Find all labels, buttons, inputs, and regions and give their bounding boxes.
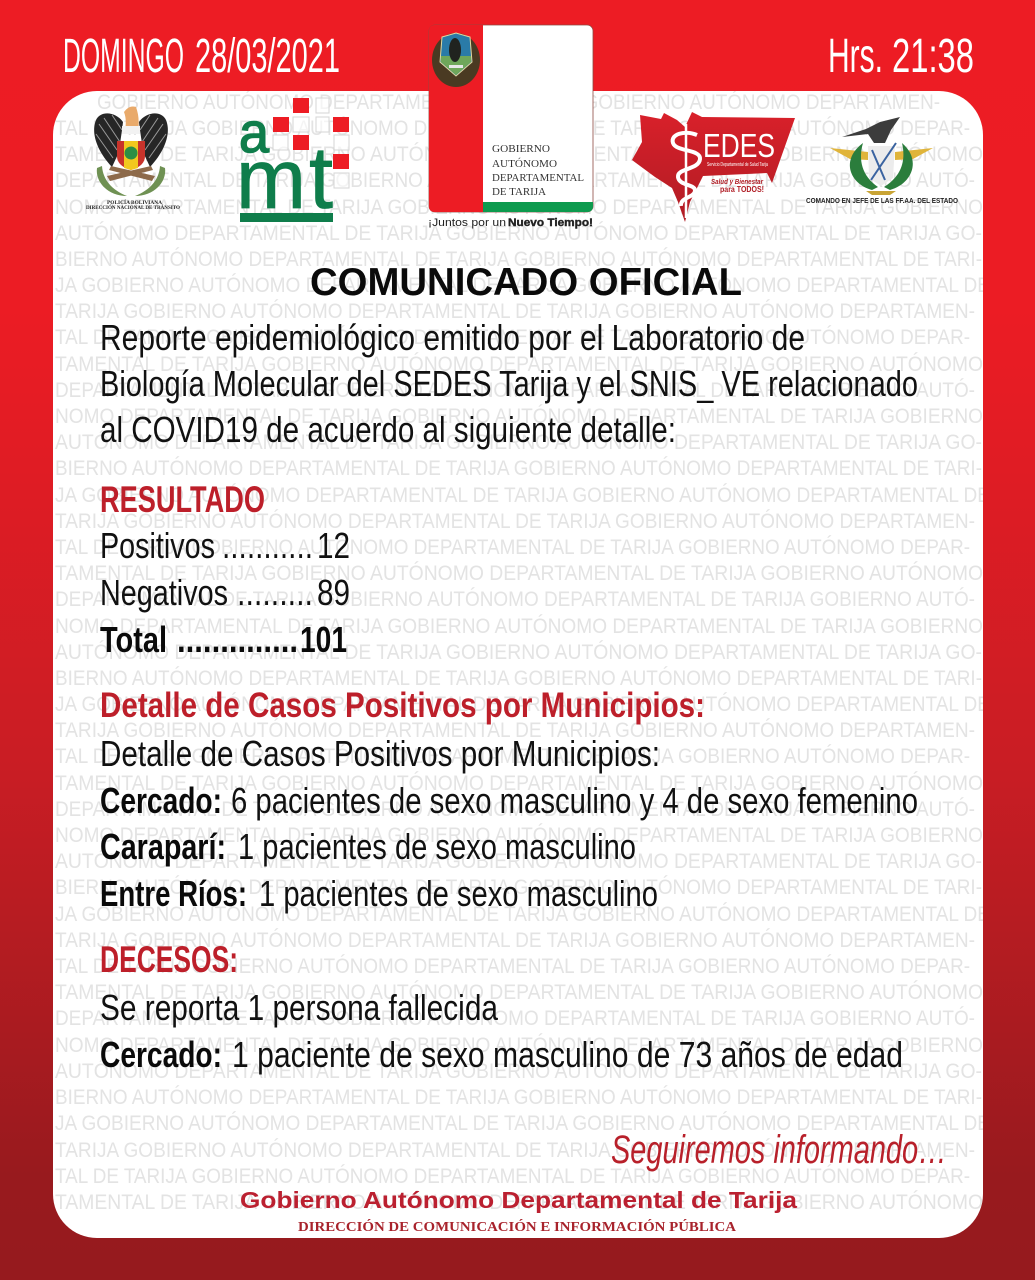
footer: department: DIRECCIÓN DE COMUNICACIÓN E INFORMACIÓN PÚBLICA (298, 1218, 737, 1235)
deaths detail: Se reporta 1 persona fallecida (100, 987, 499, 1028)
time heading: 21:38 (892, 30, 974, 83)
logo: gobierno autónomo card: DE TARIJA (492, 187, 546, 198)
logo: SEDES (632, 112, 795, 222)
deaths detail (100, 987, 903, 1075)
date heading: DOMINGO (63, 30, 184, 83)
results list: 89 (317, 572, 350, 613)
time heading: Hrs. (828, 30, 883, 83)
logo: amt (236, 98, 349, 227)
logo: comando en jefe emblem (806, 117, 959, 205)
watermark text pattern: AUTÓNOMO DEPARTAMENTAL DE TARIJA GOBIERNO AUTÓNOMO DEPARTAMENTAL DE TARIJA GO- (55, 641, 982, 664)
watermark text pattern: TAMENTAL DE TARIJA GOBIERNO AUTÓNOMO DEPARTAMENTAL DE TARIJA GOBIERNO AUTÓNOMO (55, 562, 983, 585)
watermark text pattern: GOBIERNO AUTÓNOMO DEPARTAMENTAL DE TARIJA GOBIERNO AUTÓNOMO DEPARTAMEN- (97, 91, 940, 114)
results list: .............. (177, 619, 298, 660)
results list: ......... (237, 572, 313, 613)
logo: policía eagle emblem (86, 107, 180, 211)
logo: policía eagle emblem: DIRECCIÓN NACIONAL DE TRÁNSITO (86, 205, 180, 211)
intro paragraph: Reporte epidemiológico emitido por el Laboratorio de (100, 317, 805, 358)
watermark text pattern: AUTÓNOMO DEPARTAMENTAL DE TARIJA GOBIERNO AUTÓNOMO DEPARTAMENTAL DE TARIJA GO- (55, 222, 982, 245)
deaths detail: Cercado: (100, 1034, 222, 1075)
municipal detail list: Caraparí: (100, 826, 226, 867)
municipal detail list: 1 pacientes de sexo masculino (259, 873, 658, 914)
results list: 12 (317, 525, 350, 566)
heading: casos positivos por municipios: Detalle de Casos Positivos por Municipios: (100, 686, 705, 725)
watermark text pattern: AUTÓNOMO DEPARTAMENTAL DE TARIJA GOBIERNO AUTÓNOMO DEPARTAMENTAL DE TARIJA GO- (55, 431, 982, 454)
results list: ........... (222, 525, 313, 566)
logo: amt: a (239, 101, 269, 165)
results list: 101 (300, 619, 347, 660)
slogan: Nuevo Tiempo! (508, 217, 593, 229)
municipal detail list: Detalle de Casos Positivos por Municipios: (100, 733, 660, 774)
slogan: ¡Juntos por un (428, 217, 506, 229)
municipal detail list: Cercado: (100, 780, 222, 821)
watermark text pattern: TAMENTAL DE TARIJA GOBIERNO AUTÓNOMO DEPARTAMENTAL DE TARIJA GOBIERNO AUTÓNOMO (55, 143, 983, 166)
logo: SEDES: Servicio Departamental de Salud Tarija (707, 162, 768, 168)
title: COMUNICADO OFICIAL (310, 261, 742, 304)
municipal detail list: Entre Ríos: (100, 873, 247, 914)
logo: policía eagle emblem: POLICÍA BOLIVIANA (107, 200, 162, 206)
watermark text pattern: TAMENTAL DE TARIJA GOBIERNO AUTÓNOMO DEPARTAMENTAL DE TARIJA GOBIERNO AUTÓNOMO (55, 353, 983, 376)
results list (100, 525, 350, 660)
watermark text pattern: TAMENTAL DE TARIJA GOBIERNO AUTÓNOMO DEPARTAMENTAL DE TARIJA GOBIERNO AUTÓNOMO (55, 1191, 983, 1214)
time heading (828, 30, 974, 83)
logo: amt: m (236, 132, 306, 226)
results list: Positivos (100, 525, 215, 566)
logo: SEDES: Salud y Bienestar (711, 179, 764, 186)
logo: SEDES: para TODOS! (720, 185, 764, 194)
heading: decesos: DECESOS: (100, 939, 238, 980)
icon: departmental crest (432, 33, 480, 87)
results list: Total (100, 619, 167, 660)
municipal detail list (100, 733, 918, 914)
intro paragraph: al COVID19 de acuerdo al siguiente detalle: (100, 409, 676, 450)
watermark text pattern: AUTÓNOMO DEPARTAMENTAL DE TARIJA GOBIERNO AUTÓNOMO DEPARTAMENTAL DE TARIJA GO- (55, 1060, 982, 1083)
logo: gobierno autónomo card: DEPARTAMENTAL (492, 173, 584, 184)
municipal detail list: 1 pacientes de sexo masculino (238, 826, 636, 867)
intro paragraph (100, 317, 918, 450)
results list: Negativos (100, 572, 228, 613)
watermark text pattern: TAMENTAL DE TARIJA GOBIERNO AUTÓNOMO DEPARTAMENTAL DE TARIJA GOBIERNO AUTÓNOMO (55, 772, 983, 795)
logo: amt: t (309, 128, 333, 227)
logo: gobierno autónomo card: GOBIERNO (492, 144, 550, 155)
watermark text pattern: AUTÓNOMO DEPARTAMENTAL DE TARIJA GOBIERNO AUTÓNOMO DEPARTAMENTAL DE TARIJA GO- (55, 850, 982, 873)
logo: gobierno autónomo card: AUTÓNOMO (492, 158, 557, 170)
logo: gobierno autónomo card (429, 25, 593, 212)
deaths detail: 1 paciente de sexo masculino de 73 años de edad (232, 1034, 903, 1075)
date heading: 28/03/2021 (195, 30, 340, 83)
watermark text pattern (55, 91, 990, 1214)
slogan (428, 217, 593, 229)
footer: government name: Gobierno Autónomo Departamental de Tarija (240, 1187, 797, 1213)
heading: resultado: RESULTADO (100, 479, 265, 520)
watermark text pattern: TAMENTAL DE TARIJA GOBIERNO AUTÓNOMO DEPARTAMENTAL DE TARIJA GOBIERNO AUTÓNOMO (55, 981, 983, 1004)
logo: SEDES: EDES (703, 127, 775, 164)
logo: comando en jefe emblem: COMANDO EN JEFE DE LAS FF.AA. DEL ESTADO (806, 198, 959, 205)
